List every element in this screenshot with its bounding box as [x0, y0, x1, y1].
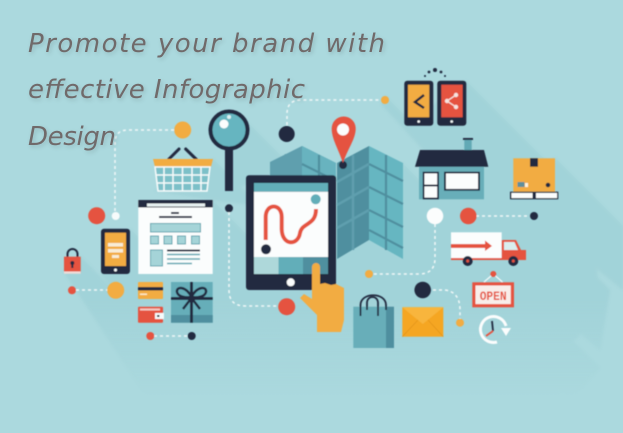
- right phone: [437, 81, 466, 126]
- icon: envelope: [402, 307, 443, 337]
- long diagonal shadows: [68, 85, 622, 317]
- title: Design: [28, 122, 116, 152]
- icon: open sign: [472, 271, 514, 307]
- icon: share phones: [404, 68, 466, 126]
- icon: shopping basket: [153, 149, 213, 191]
- title: effective Infographic: [28, 75, 305, 105]
- icon: credit card: [138, 282, 163, 299]
- icon: clock: [480, 316, 511, 342]
- icon: open sign: OPEN: [480, 290, 507, 304]
- icon: wallet: [138, 307, 164, 323]
- icon: tablet with route: [246, 175, 336, 290]
- icon: folded map: [270, 146, 403, 259]
- left phone: [404, 81, 433, 126]
- icon: pointing hand: [300, 263, 344, 332]
- icon: shopping bag: [353, 295, 394, 348]
- icon: padlock: [64, 249, 81, 274]
- icon: magnifying glass: [210, 112, 248, 191]
- icon: house: [415, 138, 488, 199]
- route line: [266, 206, 316, 242]
- title: [28, 29, 385, 152]
- dots: [68, 96, 538, 340]
- icon: location pin: [332, 117, 356, 169]
- title: Promote your brand with: [28, 29, 385, 59]
- icon: delivery truck: [451, 232, 526, 266]
- dotted connectors: [76, 100, 530, 336]
- main illustration: [64, 68, 558, 348]
- signal dots: [424, 68, 446, 77]
- icon: smartphone: [101, 229, 130, 274]
- infographic canvas: [28, 32, 622, 349]
- icon: gift box: [171, 282, 213, 323]
- icon: parcel on pallet: [510, 158, 558, 199]
- icon: web page: [138, 200, 213, 274]
